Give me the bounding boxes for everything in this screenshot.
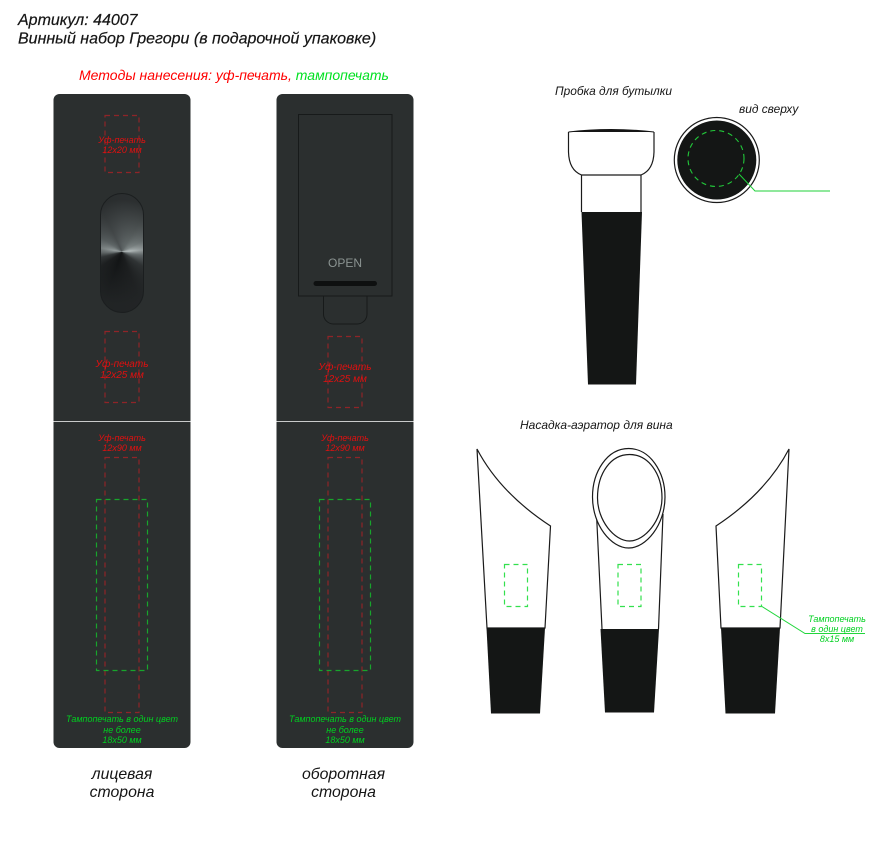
print area: pad print 18x50: не более: [326, 725, 364, 735]
print area: pad print 18x50: [289, 500, 401, 745]
caption: front side: лицевая: [91, 766, 153, 783]
print area: pad print 18x50: 18x50 мм: [325, 735, 365, 745]
callout: pad print 8x15: 8x15 мм: [820, 634, 854, 644]
print area: UV 12x90: 12x90 мм: [325, 443, 365, 453]
print area: UV 12x90: [97, 433, 146, 712]
aerator left view: [477, 449, 550, 714]
print area: UV 12x25: [95, 332, 148, 402]
caption: back side: оборотная: [302, 766, 386, 783]
print area: UV 12x90: Уф-печать: [97, 433, 146, 443]
box flap with OPEN label: [298, 114, 392, 324]
print area: pad print 18x50: Тампопечать в один цвет: [66, 714, 178, 724]
print area: UV 12x90: 12x90 мм: [102, 443, 142, 453]
panel: back side: [276, 94, 414, 748]
print area: UV 12x20: [97, 116, 146, 172]
aerator front view: [592, 448, 665, 712]
callout: pad print 8x15: Тампопечать: [808, 614, 866, 624]
title: Артикул: 44007: [17, 12, 139, 29]
print area: pad print 18x50: Тампопечать в один цвет: [289, 714, 401, 724]
print area: UV 12x90: [320, 433, 369, 712]
icon: metallic pill button: [100, 193, 144, 313]
callout: pad print 8x15: [762, 606, 866, 644]
panel: front side: [54, 94, 190, 748]
heading: top view: вид сверху: [739, 102, 799, 116]
heading: wine aerator: Насадка-аэратор для вина: [520, 418, 673, 432]
caption: back side: сторона: [311, 784, 376, 801]
caption: front side: сторона: [90, 784, 155, 801]
print area: pad print 18x50: [66, 500, 178, 745]
print area: UV 12x20: 12x20 мм: [102, 145, 142, 155]
print area: UV 12x25: 12x25 мм: [100, 370, 144, 381]
print area: pad print 18x50: 18x50 мм: [102, 735, 142, 745]
bottle stopper side view: [568, 130, 654, 384]
print area: UV 12x25: 12x25 мм: [323, 374, 367, 385]
print area: pad print 18x50: не более: [103, 725, 141, 735]
heading: bottle stopper: Пробка для бутылки: [555, 84, 672, 98]
box flap with OPEN label: OPEN: [328, 256, 362, 270]
print area: UV 12x90: Уф-печать: [320, 433, 369, 443]
print area: UV 12x20: Уф-печать: [97, 135, 146, 145]
caption: back side: [302, 766, 386, 801]
print area: UV 12x25: Уф-печать: [95, 358, 148, 370]
print area: UV 12x25: Уф-печать: [318, 361, 371, 373]
print area: UV 12x25: [318, 336, 371, 408]
heading: application methods: Методы нанесения: уф-печать, тампопечать: [79, 67, 389, 83]
callout: pad print 8x15: в один цвет: [811, 624, 863, 634]
title: Винный набор Грегори (в подарочной упаковке): [18, 30, 376, 48]
bottle stopper top view: [674, 118, 830, 202]
aerator right view: [716, 449, 789, 714]
caption: front side: [90, 766, 155, 801]
title: [17, 12, 376, 48]
